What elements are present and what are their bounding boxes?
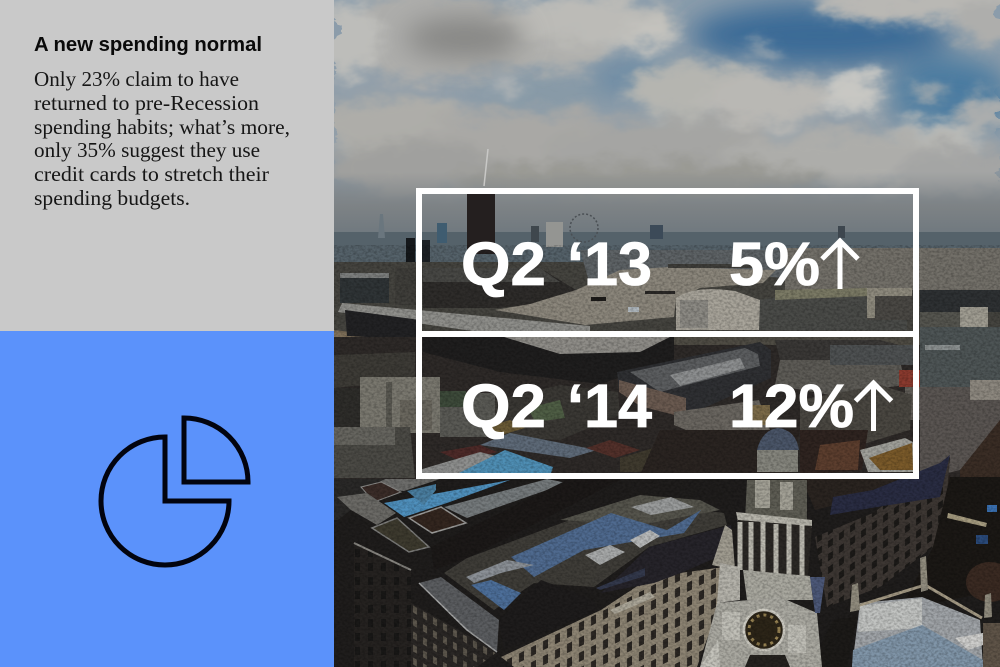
stat: Q2 '13 up 5%: 5%	[729, 230, 820, 298]
photo: blue glass roof block	[334, 479, 1000, 667]
photo: foreground slate roofs and facade	[411, 495, 735, 667]
panel: blue icon panel	[0, 331, 334, 667]
icon: pie chart	[98, 416, 250, 568]
stat: Q2 '14 up 12%: 12%	[729, 372, 854, 440]
body text: credit cards to stretch their	[34, 162, 269, 186]
stat: Q2 '14 up 12%: Q2	[461, 372, 546, 440]
heading: A new spending normal	[34, 34, 262, 56]
photo: sky with clouds	[315, 0, 1000, 242]
photo: right curved building and pale roof	[800, 455, 1000, 667]
body text	[34, 67, 290, 210]
body text: spending habits; what’s more,	[34, 115, 290, 139]
body text: only 35% suggest they use	[34, 138, 260, 162]
panel: city photo with stats	[334, 0, 1000, 667]
stats frame	[419, 191, 916, 476]
photo: river Thames	[334, 264, 776, 364]
photo: distant skyline	[334, 149, 1000, 272]
stat: Q2 '13 up 5%: Q2	[461, 230, 546, 298]
bridge	[338, 303, 590, 332]
stat: Q2 '14 up 12%: ‘14	[567, 372, 652, 440]
photo: rooftops inside lower frame	[334, 327, 1000, 482]
stat: Q2 '13 up 5%: ‘13	[567, 230, 652, 298]
photo: fine detail texture	[334, 245, 1000, 667]
photo: mid city band	[334, 248, 1000, 667]
stat: Q2 '13 up 5%	[461, 230, 858, 298]
panel: text on grey	[0, 0, 334, 331]
body text: Only 23% claim to have	[34, 67, 239, 91]
body text: spending budgets.	[34, 186, 190, 210]
photo: cathedral clock tower	[700, 428, 825, 667]
photo: domed riverside building	[676, 289, 760, 330]
stat: Q2 '14 up 12%	[461, 372, 892, 440]
body text: returned to pre-Recession	[34, 91, 260, 115]
